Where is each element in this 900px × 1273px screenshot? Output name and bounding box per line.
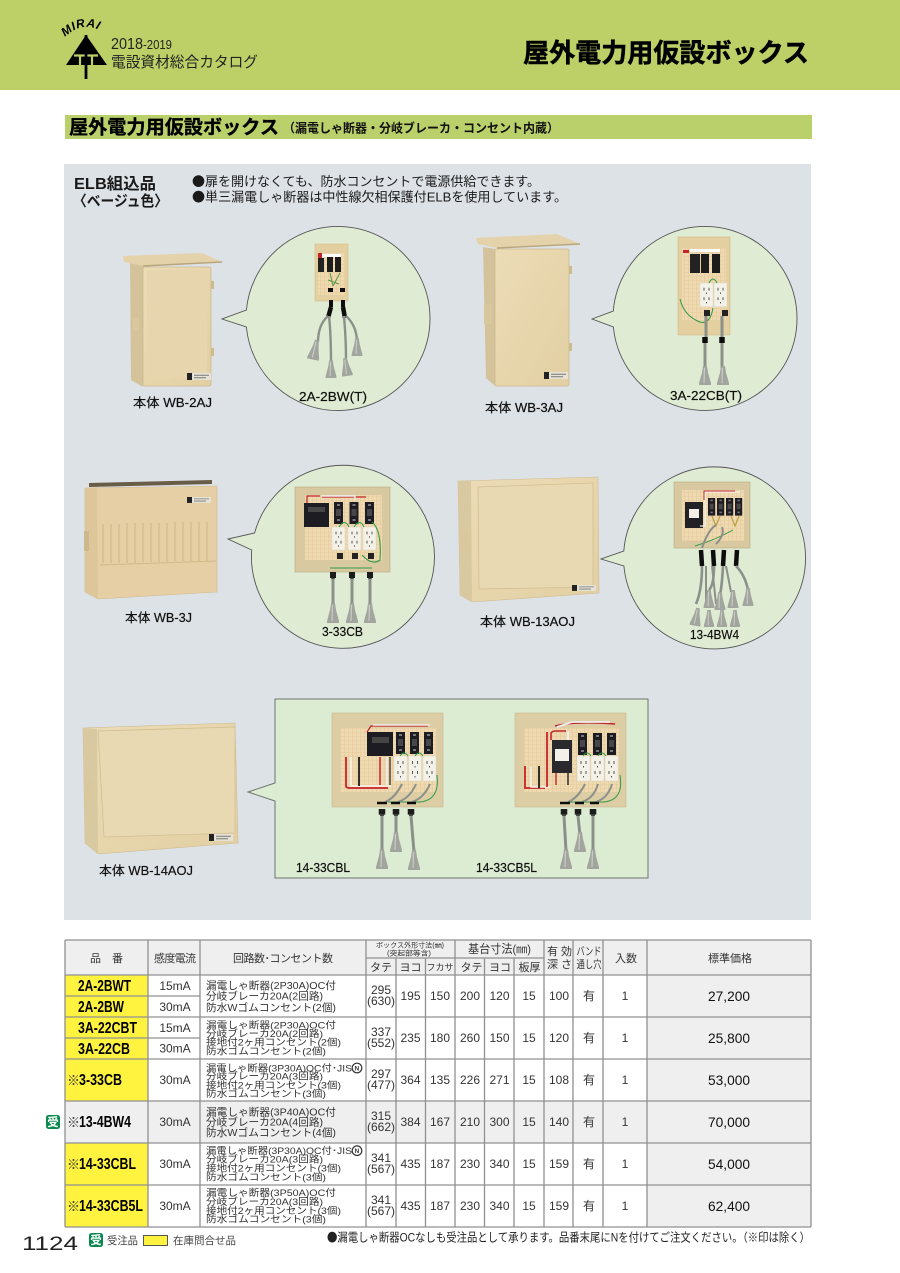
- callout: 2A-2BW(T): [222, 226, 430, 410]
- label: 3-33CB: 3-33CB: [322, 625, 363, 639]
- legend: order item badge: 受: [90, 1233, 102, 1247]
- product photo: WB-3J: [84, 480, 217, 599]
- label: WB-2AJ: 本体 WB-2AJ: [133, 396, 212, 410]
- row: 14-33CB5L: 防水ゴムコンセント(3個): [206, 1214, 326, 1226]
- row: 14-33CB5L: 接地付2ヶ用コンセント(3個): [206, 1205, 341, 1217]
- row: 3A-22CBT / 3A-22CB: 3A-22CB: [78, 1041, 130, 1058]
- row: 2A-2BWT / 2A-2BW: 150: [430, 989, 450, 1003]
- row: 14-33CBL: 防水ゴムコンセント(3個): [206, 1172, 326, 1184]
- row: 14-33CBL: 54,000: [708, 1156, 750, 1172]
- row: 14-33CBL: ※: [67, 1154, 80, 1173]
- row: 13-4BW4: 15: [522, 1115, 536, 1129]
- row: 14-33CB5L: 漏電しゃ断器(3P50A)OC付: [206, 1187, 336, 1199]
- row: 2A-2BWT / 2A-2BW: 防水Wゴムコンセント(2個): [206, 1001, 336, 1014]
- photo: 3-33CB interior: [295, 487, 390, 623]
- row: 13-4BW4: ※: [67, 1112, 80, 1131]
- row: 2A-2BWT / 2A-2BW: 100: [549, 989, 569, 1003]
- row: 14-33CBL: 230: [460, 1157, 480, 1171]
- product photo: WB-3AJ: [476, 234, 580, 386]
- row: 2A-2BWT / 2A-2BW: 2A-2BW: [78, 999, 124, 1016]
- row: 13-4BW4: 167: [430, 1115, 450, 1129]
- row: 14-33CB5L: 30mA: [159, 1199, 191, 1213]
- row: 3A-22CBT / 3A-22CB: 15: [522, 1031, 536, 1045]
- header band: [0, 0, 900, 90]
- table header row: 効: [561, 945, 572, 958]
- row: 3-33CB: 53,000: [708, 1072, 750, 1088]
- logo: MIRAI tree: MIRAI: [61, 19, 102, 37]
- row: 3-33CB: 有: [583, 1073, 595, 1087]
- table header row: 基台寸法(㎜): [468, 941, 531, 956]
- row: 2A-2BWT / 2A-2BW: 15: [522, 989, 536, 1003]
- row: 3A-22CBT / 3A-22CB: (552): [367, 1036, 395, 1050]
- row: 14-33CB5L: [67, 1187, 750, 1226]
- feature bullet 1: ●扉を開けなくても、防水コンセントで電源供給できます。: [192, 171, 540, 190]
- footnote: ●漏電しゃ断器OCなしも受注品として承ります。品番末尾にNを付けてご注文ください。（※印は除く）: [327, 1228, 810, 1246]
- row: 3-33CB: 接地付2ヶ用コンセント(3個): [206, 1079, 341, 1091]
- photo: 3A-22CB(T) interior: [678, 237, 730, 385]
- row: 2A-2BWT / 2A-2BW: 295: [371, 983, 391, 997]
- product photo: WB-2AJ: [123, 253, 222, 387]
- row: 3A-22CBT / 3A-22CB: 120: [549, 1031, 569, 1045]
- table header row: ヨコ: [400, 962, 422, 974]
- row: 3-33CB: 108: [549, 1073, 569, 1087]
- label: 14-33CB5L: 14-33CB5L: [476, 861, 537, 875]
- row: 13-4BW4: 384: [400, 1115, 421, 1129]
- callout: 13-4BW4: [601, 467, 806, 649]
- row: 14-33CBL: 435: [400, 1157, 421, 1171]
- row: 14-33CB5L: 159: [549, 1199, 569, 1213]
- row: 13-4BW4: 210: [460, 1115, 480, 1129]
- row: 14-33CBL: N: [354, 1148, 360, 1155]
- label: 3A-22CB(T): 3A-22CB(T): [670, 389, 742, 403]
- row: 3A-22CBT / 3A-22CB: 150: [489, 1031, 510, 1045]
- row: 14-33CB5L: 62,400: [708, 1198, 750, 1214]
- row: 14-33CBL: [67, 1145, 750, 1184]
- table header row: 感度電流: [154, 951, 196, 965]
- callout: 3A-22CB(T): [592, 226, 797, 410]
- catalog name: 電設資材総合カタログ: [111, 54, 258, 71]
- row: 13-4BW4: [46, 1106, 750, 1139]
- row: 13-4BW4: 漏電しゃ断器(3P40A)OC付: [206, 1106, 336, 1118]
- label: WB-13AOJ: 本体 WB-13AOJ: [480, 615, 575, 629]
- row: 3-33CB: 3-33CB: [79, 1072, 122, 1089]
- row: 3-33CB: 226: [460, 1073, 480, 1087]
- row: 14-33CBL: 159: [549, 1157, 569, 1171]
- row: 3A-22CBT / 3A-22CB: 25,800: [708, 1030, 750, 1046]
- row: 3-33CB: 364: [400, 1073, 421, 1087]
- row: 3-33CB: 漏電しゃ断器(3P30A)OC付･JIS: [206, 1063, 352, 1075]
- table header row: 有: [547, 944, 558, 958]
- table header row: [90, 940, 752, 974]
- row: 3A-22CBT / 3A-22CB: 30mA: [159, 1042, 191, 1056]
- row: 14-33CBL: 340: [489, 1157, 510, 1171]
- label: 2A-2BW(T): 2A-2BW(T): [299, 390, 367, 404]
- row: 3A-22CBT / 3A-22CB: 1: [622, 1031, 629, 1045]
- row: 14-33CB5L: 有: [583, 1199, 595, 1213]
- logo: MIRAI tree: [61, 19, 107, 79]
- section heading band: [65, 115, 812, 139]
- label: 13-4BW4: 13-4BW4: [690, 628, 739, 642]
- row: 3A-22CBT / 3A-22CB: 分岐ブレーカ20A(2回路): [206, 1028, 323, 1040]
- row: 14-33CBL: 有: [583, 1157, 595, 1171]
- row: 14-33CBL: 14-33CBL: [79, 1156, 136, 1173]
- row: 3A-22CBT / 3A-22CB: 235: [400, 1031, 421, 1045]
- row: 3-33CB: 30mA: [159, 1073, 191, 1087]
- callout: 3-33CB: [228, 465, 434, 648]
- product photo: WB-13AOJ: [458, 477, 599, 602]
- panel: product photos: [64, 164, 811, 920]
- row: 13-4BW4: 70,000: [708, 1114, 750, 1130]
- panel heading colour: 〈ベージュ色〉: [73, 192, 168, 210]
- photo: 14-33CB5L interior: [515, 713, 626, 869]
- row: 3-33CB: 271: [489, 1073, 510, 1087]
- row: 14-33CB5L: 340: [489, 1199, 510, 1213]
- footer: [22, 1228, 810, 1255]
- row: 14-33CBL: 1: [622, 1157, 629, 1171]
- row: 2A-2BWT / 2A-2BW: 120: [489, 989, 510, 1003]
- row: 13-4BW4: 140: [549, 1115, 569, 1129]
- row: 14-33CB5L: ※: [67, 1196, 80, 1215]
- row: 14-33CBL: 接地付2ヶ用コンセント(3個): [206, 1163, 341, 1175]
- row: 3A-22CBT / 3A-22CB: 337: [371, 1025, 391, 1039]
- row: 2A-2BWT / 2A-2BW: 有: [583, 989, 595, 1003]
- label: WB-3AJ: 本体 WB-3AJ: [485, 401, 563, 415]
- row: 3-33CB: N: [354, 1066, 360, 1072]
- row: 13-4BW4: (662): [367, 1120, 395, 1134]
- row: 13-4BW4: 30mA: [159, 1115, 191, 1129]
- table header row: 通し穴: [576, 958, 602, 971]
- table header row: 品 番: [90, 952, 123, 965]
- table header row: (突起部等含): [387, 948, 431, 957]
- table header row: 深: [547, 958, 558, 971]
- row: 2A-2BWT / 2A-2BW: 27,200: [708, 988, 750, 1004]
- row: 3A-22CBT / 3A-22CB: [78, 1020, 750, 1058]
- photo: 2A-2BW(T) interior: [307, 244, 362, 378]
- row: 3-33CB: 1: [622, 1073, 629, 1087]
- row: 3A-22CBT / 3A-22CB: 260: [460, 1031, 480, 1045]
- row: 14-33CB5L: 341: [371, 1193, 391, 1207]
- row: 13-4BW4: 有: [583, 1115, 595, 1129]
- row: 2A-2BWT / 2A-2BW: 1: [622, 989, 629, 1003]
- row: 3-33CB: (477): [367, 1078, 395, 1092]
- row: 14-33CBL: 30mA: [159, 1157, 191, 1171]
- label: 14-33CBL: 14-33CBL: [296, 861, 350, 875]
- table header row: フカサ: [426, 962, 454, 972]
- legend: order item text: 受注品: [107, 1234, 138, 1247]
- row: 14-33CB5L: 187: [430, 1199, 450, 1213]
- page number: 1124: [22, 1233, 78, 1255]
- row: 2A-2BWT / 2A-2BW: 漏電しゃ断器(2P30A)OC付: [206, 979, 336, 992]
- row: 3A-22CBT / 3A-22CB: 15mA: [159, 1021, 191, 1035]
- row: 3-33CB: ※: [67, 1070, 80, 1089]
- table header row: バンド: [576, 945, 602, 958]
- section subtitle: （漏電しゃ断器・分岐ブレーカ・コンセント内蔵）: [283, 120, 559, 136]
- panel heading ELB: ELB組込品: [74, 175, 156, 193]
- catalog year: 2018: [111, 36, 143, 53]
- row: 14-33CB5L: 分岐ブレーカ20A(3回路): [206, 1196, 323, 1208]
- row: 3A-22CBT / 3A-22CB: 3A-22CBT: [78, 1020, 137, 1037]
- row: 13-4BW4: 分岐ブレーカ20A(4回路): [206, 1116, 323, 1128]
- row: 13-4BW4: 300: [489, 1115, 510, 1129]
- label: WB-14AOJ: 本体 WB-14AOJ: [99, 864, 193, 878]
- row: 3-33CB: 297: [371, 1067, 391, 1081]
- row: 2A-2BWT / 2A-2BW: 200: [460, 989, 480, 1003]
- row: 13-4BW4: 13-4BW4: [79, 1114, 131, 1131]
- table header row: 標準価格: [708, 951, 752, 965]
- row: 14-33CB5L: 14-33CB5L: [79, 1198, 143, 1215]
- table header row: ヨコ: [489, 962, 511, 974]
- row: 13-4BW4: 315: [371, 1109, 391, 1123]
- row: 3A-22CBT / 3A-22CB: 漏電しゃ断器(2P30A)OC付: [206, 1020, 336, 1032]
- label: WB-3J: 本体 WB-3J: [125, 611, 192, 625]
- table header row: 回路数･コンセント数: [233, 952, 333, 965]
- row: 14-33CBL: 187: [430, 1157, 450, 1171]
- row: 2A-2BWT / 2A-2BW: 2A-2BWT: [78, 978, 131, 995]
- section heading: 屋外電力用仮設ボックス: [69, 116, 279, 138]
- row: 14-33CB5L: 1: [622, 1199, 629, 1213]
- row: 2A-2BWT / 2A-2BW: [78, 978, 750, 1016]
- specification table: [46, 940, 811, 1227]
- row: 14-33CBL: 15: [522, 1157, 536, 1171]
- feature bullet 2: ●単三漏電しゃ断器は中性線欠相保護付ELBを使用しています。: [192, 186, 567, 206]
- row: 2A-2BWT / 2A-2BW: (630): [367, 994, 395, 1008]
- photo: 13-4BW4 interior: [674, 482, 753, 627]
- row: 14-33CBL: 341: [371, 1151, 391, 1165]
- row: 14-33CB5L: 15: [522, 1199, 536, 1213]
- row: 2A-2BWT / 2A-2BW: 195: [400, 989, 421, 1003]
- row: 14-33CB5L: 435: [400, 1199, 421, 1213]
- row: 14-33CB5L: (567): [367, 1204, 395, 1218]
- legend: stock inquiry text: 在庫問合せ品: [173, 1234, 236, 1247]
- callout panel: 14-33CBL and 14-33CB5L: [248, 699, 648, 878]
- row: 13-4BW4: 受: [47, 1115, 59, 1129]
- table header row: ボックス外形寸法(㎜): [376, 940, 444, 950]
- row: 13-4BW4: 防水Wゴムコンセント(4個): [206, 1126, 336, 1139]
- row: 2A-2BWT / 2A-2BW: 15mA: [159, 979, 191, 993]
- table header row: タテ: [460, 961, 482, 974]
- row: 2A-2BWT / 2A-2BW: 30mA: [159, 1000, 191, 1014]
- row: 3-33CB: 分岐ブレーカ20A(3回路): [206, 1071, 323, 1083]
- row: 3A-22CBT / 3A-22CB: 接地付2ヶ用コンセント(2個): [206, 1037, 341, 1049]
- row: 3A-22CBT / 3A-22CB: 180: [430, 1031, 450, 1045]
- row: 3-33CB: 15: [522, 1073, 536, 1087]
- product photo: WB-14AOJ: [83, 723, 238, 854]
- legend: stock inquiry swatch: [144, 1236, 168, 1246]
- row: 3-33CB: [67, 1063, 750, 1100]
- row: 3A-22CBT / 3A-22CB: 有: [583, 1031, 595, 1045]
- table header row: 入数: [615, 952, 637, 965]
- row: 3-33CB: 防水ゴムコンセント(3個): [206, 1088, 326, 1100]
- row: 2A-2BWT / 2A-2BW: 分岐ブレーカ20A(2回路): [206, 990, 323, 1002]
- row: 3A-22CBT / 3A-22CB: 防水ゴムコンセント(2個): [206, 1046, 326, 1058]
- table header row: さ: [561, 958, 572, 971]
- row: 3-33CB: 135: [430, 1073, 450, 1087]
- photo: 14-33CBL interior: [332, 713, 443, 870]
- row: 13-4BW4: 1: [622, 1115, 629, 1129]
- catalog year suffix: -2019: [143, 38, 172, 52]
- row: 14-33CBL: 漏電しゃ断器(3P30A)OC付･JIS: [206, 1145, 352, 1157]
- table header row: 板厚: [518, 960, 540, 974]
- row: 14-33CBL: 分岐ブレーカ20A(3回路): [206, 1154, 323, 1166]
- row: 14-33CBL: (567): [367, 1162, 395, 1176]
- table header row: タテ: [370, 961, 392, 974]
- row: 14-33CB5L: 230: [460, 1199, 480, 1213]
- page title: 屋外電力用仮設ボックス: [523, 38, 809, 68]
